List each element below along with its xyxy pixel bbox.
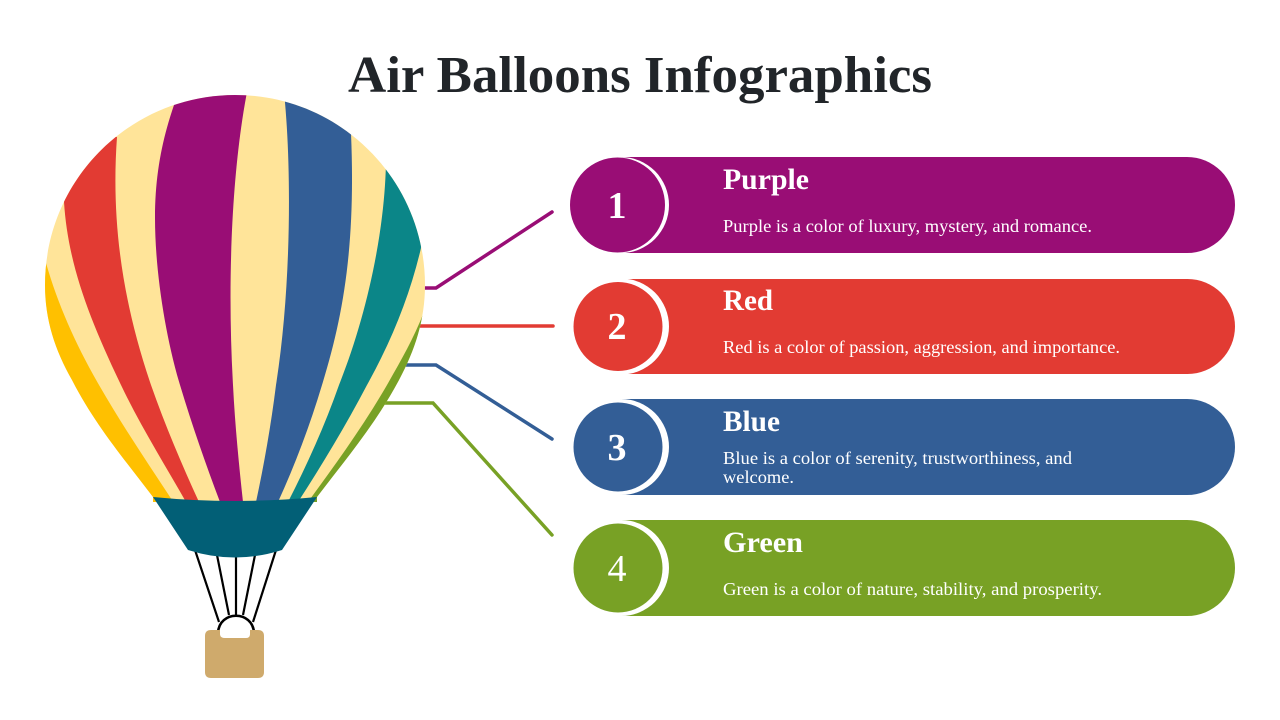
balloon envelope bbox=[45, 95, 425, 502]
balloon skirt bbox=[153, 497, 317, 558]
panel: purple bbox=[570, 157, 1235, 253]
number badge 4: 4 bbox=[608, 548, 626, 590]
connector lines bbox=[380, 212, 553, 535]
green description: Green is a color of nature, stability, and prosperity. bbox=[723, 579, 1102, 599]
basket bbox=[205, 630, 264, 678]
purple description: Purple is a color of luxury, mystery, and romance. bbox=[723, 216, 1092, 236]
blue description: welcome. bbox=[723, 467, 794, 487]
number badge 3: 3 bbox=[608, 427, 626, 469]
stripe: purple bbox=[155, 92, 247, 502]
panel: blue bbox=[573, 399, 1235, 495]
number badge 2: 2 bbox=[608, 306, 626, 348]
panel: green bbox=[573, 520, 1235, 616]
hot air balloon illustration bbox=[20, 90, 430, 678]
number badge 2 bbox=[574, 282, 662, 371]
number badge 4 bbox=[574, 524, 662, 612]
stripe: red bbox=[60, 130, 199, 502]
stripe: blue bbox=[256, 92, 352, 502]
purple heading: Purple bbox=[723, 163, 809, 196]
red heading: Red bbox=[723, 284, 773, 317]
stripe: green bbox=[311, 316, 422, 502]
stripe: yellow bbox=[45, 263, 171, 502]
blue description: Blue is a color of serenity, trustworthiness, and bbox=[723, 448, 1072, 468]
red description: Red is a color of passion, aggression, and importance. bbox=[723, 337, 1120, 357]
title: Air Balloons Infographics bbox=[348, 47, 932, 104]
number badge 1: 1 bbox=[608, 185, 626, 227]
number badge 3 bbox=[574, 402, 662, 492]
ropes bbox=[195, 550, 276, 633]
green heading: Green bbox=[723, 526, 803, 559]
blue heading: Blue bbox=[723, 405, 780, 438]
panel: red bbox=[573, 278, 1235, 374]
number badge 1 bbox=[570, 158, 665, 252]
stripe: teal bbox=[288, 160, 430, 502]
